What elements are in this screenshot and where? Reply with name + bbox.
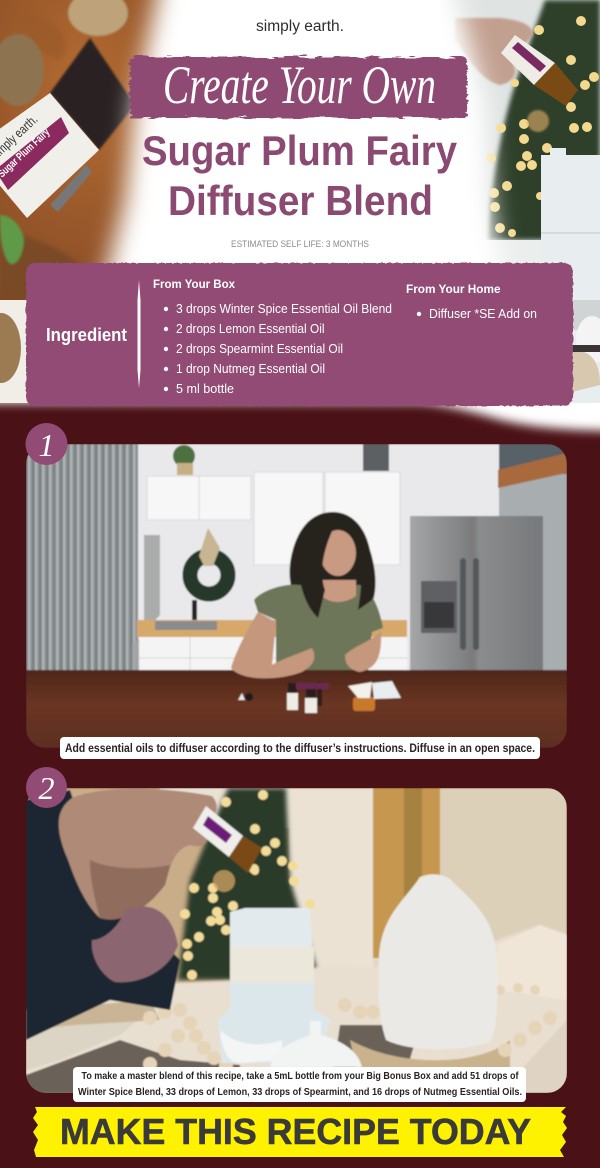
plant xyxy=(173,445,195,475)
counter and sink xyxy=(137,600,407,670)
list: from your box: 5 ml bottle xyxy=(176,382,234,396)
oil bottle xyxy=(193,806,262,873)
step 2 badge: 2 xyxy=(38,770,54,806)
corrugated wall xyxy=(26,444,138,670)
step 2 caption: Winter Spice Blend, 33 drops of Lemon, 33 drops of Spearmint, and 16 drops of Nutmeg Essential Oils. xyxy=(78,1086,522,1098)
step 1 badge: 1 xyxy=(38,427,54,463)
divider xyxy=(138,280,140,388)
list: from your home xyxy=(406,282,537,321)
list: from your box xyxy=(153,277,392,396)
main title: Diffuser Blend xyxy=(168,177,433,224)
step 1 caption xyxy=(60,737,540,759)
step 1 photo: woman in kitchen xyxy=(26,444,567,748)
fridge xyxy=(410,516,543,670)
large diffuser xyxy=(378,874,497,1049)
main title: Sugar Plum Fairy xyxy=(142,127,458,174)
list: from your home: From Your Home xyxy=(406,282,501,296)
step 2 photo: diffuser and hands xyxy=(26,788,567,1093)
shelf life note: ESTIMATED SELF LIFE: 3 MONTHS xyxy=(231,239,369,249)
step 2 caption: To make a master blend of this recipe, take a 5mL bottle from your Big Bonus Box and add 51 drops of xyxy=(82,1070,519,1082)
christmas tree xyxy=(178,788,320,980)
step 1 badge xyxy=(26,423,68,465)
list: from your box: From Your Box xyxy=(153,277,235,291)
bottles and jar on table xyxy=(238,681,401,713)
jacket and hands xyxy=(26,789,217,1040)
table xyxy=(26,670,567,748)
main title xyxy=(142,127,458,224)
list: from your home: Diffuser *SE Add on xyxy=(429,307,537,321)
wooden beads xyxy=(143,983,557,1073)
right wall and beam xyxy=(498,444,567,670)
list: from your box: 2 drops Spearmint Essential Oil xyxy=(176,342,343,356)
white glow behind titles xyxy=(100,0,505,300)
small diffuser lid xyxy=(270,1021,362,1067)
script heading: Create Your Own: Create Your Own xyxy=(163,55,436,115)
wreath xyxy=(190,528,228,594)
panel: ingredients xyxy=(26,263,573,406)
logo: simply earth: simply earth. xyxy=(256,18,344,35)
list: from your box: 2 drops Lemon Essential Oil xyxy=(176,322,324,336)
woman xyxy=(231,512,383,678)
left photo: wooden board with bottle xyxy=(0,0,176,403)
header white backdrop xyxy=(0,0,600,431)
list: from your box: 1 drop Nutmeg Essential Oil xyxy=(176,362,325,376)
heading: ingredient: Ingredient xyxy=(46,325,127,345)
step 2 badge xyxy=(26,767,67,808)
right photo: tree, hand and diffuser xyxy=(440,0,600,403)
small diffuser xyxy=(218,908,331,1063)
cabinets xyxy=(147,472,400,565)
step 2 caption xyxy=(73,1067,526,1102)
step 1 caption: Add essential oils to diffuser according to the diffuser’s instructions. Diffuse in an open space. xyxy=(65,743,535,755)
list: from your box: 3 drops Winter Spice Essential Oil Blend xyxy=(176,302,392,316)
fabric and table xyxy=(26,925,567,1093)
call to action banner: MAKE THIS RECIPE TODAY xyxy=(60,1111,531,1152)
brush stroke title banner xyxy=(130,55,467,118)
header photo area xyxy=(0,0,600,405)
wall and wood frame xyxy=(26,788,567,988)
